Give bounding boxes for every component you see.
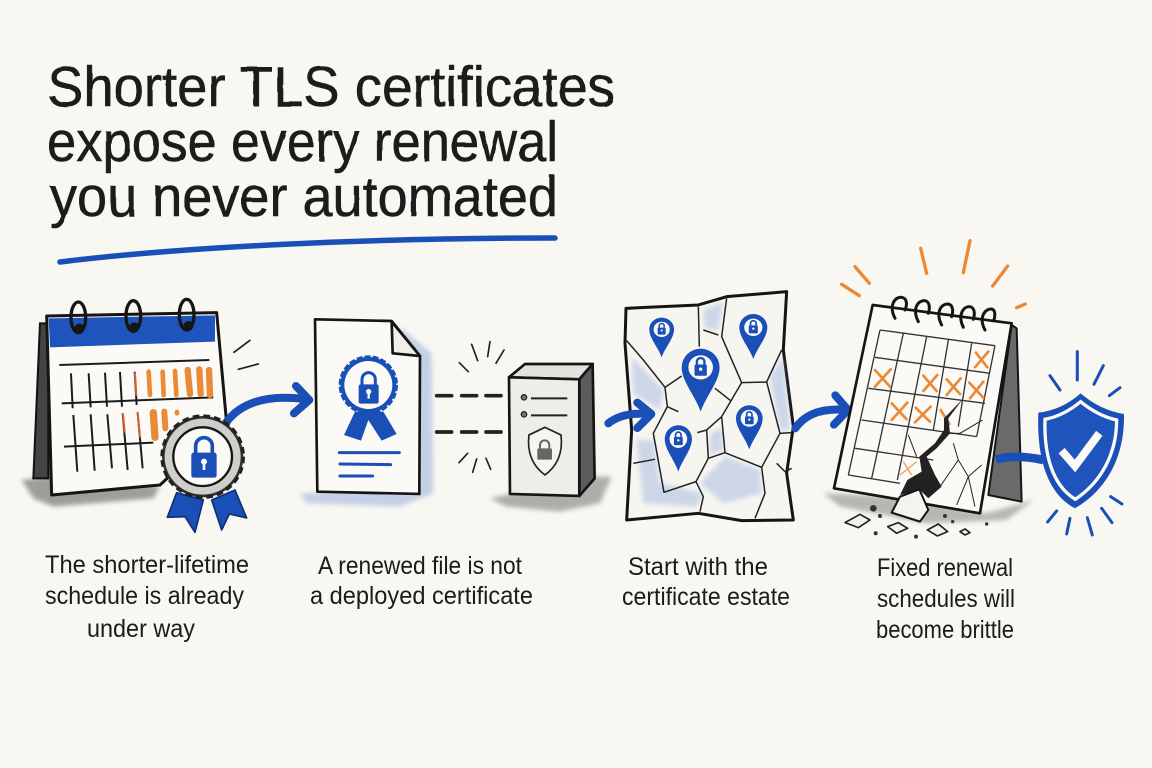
- main crack: [900, 398, 963, 498]
- caption 2: A renewed file is not: [318, 552, 522, 580]
- caption 3: [622, 553, 790, 611]
- caption 1: The shorter-lifetime: [45, 551, 249, 579]
- caption 4: schedules will: [877, 585, 1015, 613]
- location pin: [736, 405, 763, 449]
- server shadow: [490, 477, 612, 512]
- title: you never automated: [50, 165, 558, 229]
- calendar page: [47, 313, 227, 495]
- title: expose every renewal: [47, 110, 558, 174]
- broken chip: [892, 489, 928, 522]
- caption 3: certificate estate: [622, 583, 790, 611]
- map sheet: [625, 292, 793, 521]
- caption 3: Start with the: [628, 553, 768, 581]
- server lights and slots: [521, 395, 567, 417]
- map cracks: [627, 298, 792, 518]
- calendar grid: [848, 330, 995, 483]
- server: [509, 364, 595, 496]
- location pin: [649, 318, 674, 357]
- document text lines: [339, 453, 399, 476]
- calendar shadow: [22, 477, 160, 507]
- title underline: [60, 238, 555, 262]
- title: Shorter TLS certificates: [47, 55, 615, 119]
- illustration: brittle calendar and shield: [823, 241, 1124, 539]
- illustration: certificate document and server: [300, 319, 612, 512]
- caption 2: a deployed certificate: [310, 582, 533, 610]
- illustration: calendar with certificate badge: [22, 299, 309, 532]
- connector arrow out of map: [795, 395, 848, 428]
- caption 1: [45, 551, 249, 643]
- certificate badge: [162, 416, 243, 497]
- server shield: [529, 427, 561, 475]
- document fold: [392, 322, 420, 356]
- dashed connection: [437, 396, 501, 432]
- caption 4: Fixed renewal: [877, 554, 1013, 582]
- calendar back stand: [988, 325, 1022, 502]
- secondary cracks: [908, 420, 983, 507]
- shield with check: [1038, 393, 1124, 508]
- calendar page: [834, 305, 1012, 513]
- orange alarm rays: [842, 241, 1025, 308]
- binder rings: [71, 299, 194, 334]
- location pin: [739, 314, 767, 359]
- signal ticks: [459, 342, 504, 472]
- location pin: [665, 425, 692, 472]
- calendar header: [49, 315, 215, 347]
- caption 2: [310, 552, 533, 610]
- illustration: certificate estate map: [608, 292, 848, 521]
- orange shortened marks: [123, 369, 210, 437]
- document blue shading: [300, 327, 433, 507]
- caption 1: schedule is already: [45, 582, 244, 610]
- binder rings: [892, 297, 995, 330]
- title: [47, 55, 615, 229]
- timeline marks: [59, 360, 213, 472]
- orange crosses: [875, 352, 988, 424]
- connector to shield: [996, 457, 1043, 460]
- debris: [845, 505, 988, 539]
- ribbon tails: [167, 490, 247, 532]
- faded cross: [900, 462, 917, 475]
- ground shadow: [823, 493, 1033, 523]
- caption 1: under way: [87, 615, 195, 643]
- small ticks: [234, 340, 258, 369]
- blue shield rays: [1048, 352, 1122, 535]
- caption 4: [876, 554, 1015, 644]
- calendar stand: [33, 323, 48, 478]
- caption 4: become brittle: [876, 616, 1014, 644]
- map blue shading: [632, 302, 790, 507]
- document: [315, 319, 420, 494]
- connector arrow into map: [608, 403, 651, 428]
- connector arrow: [227, 386, 309, 422]
- location pin: central: [682, 349, 720, 412]
- document badge: [340, 357, 396, 413]
- document ribbon: [344, 412, 397, 441]
